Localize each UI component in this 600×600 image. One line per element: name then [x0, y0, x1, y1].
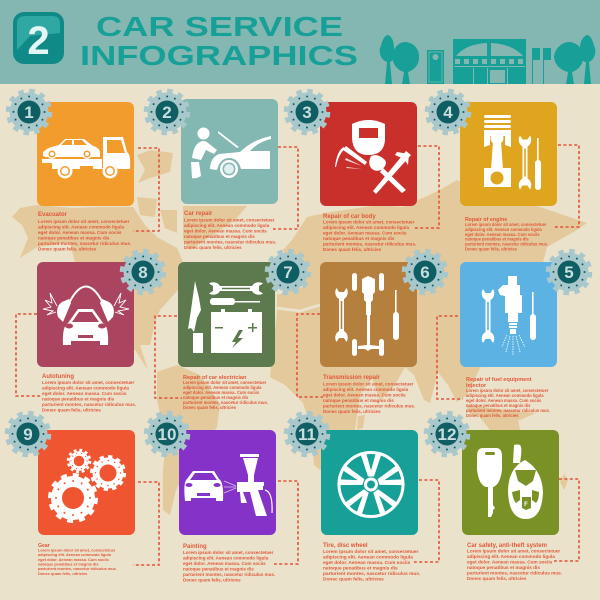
panel: 9 gear — [38, 430, 135, 535]
text block 9: parturient montes, nascetur ridiculus mus. — [38, 566, 117, 571]
text block 10: adipiscing elit. Aenean commodo ligula — [183, 556, 269, 560]
text block 6 — [323, 375, 415, 414]
gear 12 — [426, 413, 468, 455]
text block 3: parturient montes, nascetur ridiculus mus. — [323, 242, 416, 246]
gear 6 — [404, 251, 446, 293]
text block 11: Tire, disc wheel — [323, 543, 368, 549]
gear 3 — [286, 91, 328, 133]
text block 12: Donec quam felis, ultricies — [467, 576, 527, 581]
panel: 3 car body repair — [320, 102, 417, 206]
text block 12: adipiscing elit. Aenean commodo ligula — [467, 554, 555, 559]
world map — [12, 150, 587, 515]
text block 1: parturient montes, nascetur ridiculus mus. — [38, 241, 131, 246]
gear 8 — [122, 251, 164, 293]
text block 8: adipiscing elit. Aenean commodo ligula — [42, 386, 129, 390]
text block 8 — [42, 374, 136, 412]
text block 6: parturient montes, nascetur ridiculus mus. — [323, 404, 415, 408]
panel: 10 painting — [179, 430, 276, 535]
text block 11: natoque penatibus et magnis dis — [323, 566, 398, 572]
icon: tow truck — [42, 137, 130, 178]
panel: 6 transmission repair — [320, 262, 417, 367]
text block 12: Lorem ipsum dolor sit amet, consectetuer — [467, 548, 560, 554]
text block 9: Donec quam felis, ultricies — [38, 571, 87, 576]
text block 2: adipiscing elit. Aenean commodo ligula — [184, 223, 270, 228]
skyline: trees, kiosk, garage — [380, 35, 595, 84]
text block 2: eget dolor. Aenean massa. Cum sociis — [184, 228, 267, 234]
text block 4 — [465, 217, 548, 252]
text block 4: Repair of engine — [465, 217, 507, 223]
gear 1 — [8, 91, 50, 133]
header band — [0, 0, 600, 84]
text block 2: Lorem ipsum dolor sit amet, consectetuer — [184, 218, 275, 222]
text block 3 — [323, 214, 416, 252]
title — [80, 11, 358, 71]
text block 4: natoque penatibus et magnis dis — [465, 237, 529, 242]
icon: clip, wrench, screwdriver, battery — [188, 281, 263, 353]
text block 12: natoque penatibus et magnis dis — [467, 565, 540, 570]
text block 5: eget dolor. Aenean massa. Cum sociis — [466, 398, 542, 403]
gear 5: 5 — [564, 263, 574, 282]
text block 12: eget dolor. Aenean massa. Cum sociis — [467, 560, 553, 564]
text block 6: natoque penatibus et magnis dis — [323, 398, 394, 403]
panel: 5 fuel injector repair — [460, 262, 557, 367]
text block 9: natoque penatibus et magnis dis — [38, 562, 99, 566]
text block 10: natoque penatibus et magnis dis — [183, 566, 254, 572]
text block 2: parturient montes, nascetur ridiculus mus. — [184, 240, 276, 244]
title: INFOGRAPHICS — [80, 40, 358, 71]
text block 4: Donec quam felis, ultricies — [465, 246, 518, 252]
panel: 12 car safety — [462, 430, 559, 535]
text block 1: adipiscing elit. Aenean commodo ligula — [38, 224, 125, 230]
text block 2: natoque penatibus et magnis dis — [184, 234, 255, 239]
text block 10: parturient montes, nascetur ridiculus mus. — [183, 572, 275, 577]
icon: piston and tools — [484, 115, 541, 190]
gear 9: 9 — [23, 425, 33, 444]
text block 8: natoque penatibus et magnis dis — [42, 396, 115, 402]
text block 9 — [38, 543, 117, 576]
text block 6: Donec quam felis, ultricies — [323, 409, 381, 414]
text block 1: Evacuator — [38, 212, 68, 218]
text block 3: adipiscing elit. Aenean commodo ligula — [323, 225, 410, 230]
text block 1: Donec quam felis, ultricies — [38, 246, 97, 252]
gear 9 — [7, 413, 49, 455]
text block 9: eget dolor. Aenean massa. Cum sociis — [38, 557, 109, 562]
text block 4: eget dolor. Aenean massa. Cum sociis — [465, 232, 540, 237]
text block 3: Repair of car body — [323, 214, 376, 220]
text block 9: Lorem ipsum dolor sit amet, consectetuer — [38, 548, 116, 552]
gear 4: 4 — [443, 103, 453, 122]
gear 10 — [146, 413, 188, 455]
gear 7 — [267, 251, 309, 293]
gear 6: 6 — [420, 263, 430, 282]
text block 4: adipiscing elit. Aenean commodo ligula — [465, 227, 542, 232]
text block 6: eget dolor. Aenean massa. Cum sociis — [323, 392, 406, 398]
text block 11: Donec quam felis, ultricies — [323, 576, 384, 582]
text block 3: natoque penatibus et magnis dis — [323, 236, 395, 241]
icon: mechanic and car — [191, 128, 271, 178]
gear 11: 11 — [298, 425, 316, 444]
icon: car and spray gun — [184, 454, 272, 516]
gear 11 — [286, 413, 328, 455]
panel: 4 engine repair — [460, 102, 557, 206]
text block 8: Autotuning — [42, 374, 74, 380]
text block 5 — [466, 377, 550, 418]
gear 8: 8 — [138, 263, 148, 282]
text block 4: parturient montes, nascetur ridiculus mus. — [465, 242, 548, 247]
icon: wrench, injector, screwdriver — [482, 276, 536, 355]
map sea strip — [276, 305, 320, 311]
text block 10: Painting — [183, 544, 207, 550]
text block 11: parturient montes, nascetur ridiculus mus. — [323, 571, 420, 577]
icon: alloy wheel — [337, 452, 405, 517]
text block 7: parturient montes, nascetur ridiculus mus. — [183, 400, 268, 405]
text block 12 — [467, 543, 562, 581]
text block 10: eget dolor. Aenean massa. Cum sociis — [183, 561, 266, 566]
panel: 2 car repair — [181, 99, 278, 204]
text block 5: natoque penatibus et magnis dis — [466, 403, 531, 408]
panel: 1 evacuator — [37, 102, 134, 206]
text block 9: adipiscing elit. Aenean commodo ligula — [38, 552, 112, 557]
text block 1 — [38, 212, 131, 252]
text block 11 — [323, 543, 420, 582]
text block 4: Lorem ipsum dolor sit amet, consectetuer — [465, 222, 547, 227]
gear 1: 1 — [24, 103, 34, 122]
gear 4 — [427, 91, 469, 133]
text block 7: natoque penatibus et magnis dis — [183, 395, 249, 400]
title: CAR SERVICE — [96, 11, 343, 42]
text block 11: eget dolor. Aenean massa. Cum sociis — [323, 560, 411, 566]
text block 10 — [183, 544, 275, 582]
text block 1: Lorem ipsum dolor sit amet, consectetuer — [38, 219, 130, 224]
connector lines — [16, 145, 579, 565]
icon: key and alarm remote: F — [524, 502, 528, 508]
icon: gears — [50, 450, 124, 521]
text block 5: Repair of fuel equipment — [466, 377, 532, 383]
gear 7: 7 — [283, 263, 293, 282]
text block 7: Lorem ipsum dolor sit amet, consectetuer — [183, 380, 267, 385]
text block 2: Car repair — [184, 211, 213, 217]
text block 2: Donec quam felis, ultricies — [184, 245, 242, 250]
icon: car with headphones — [43, 286, 129, 345]
gear 2: 2 — [162, 103, 172, 122]
text block 7: adipiscing elit. Aenean commodo ligula — [183, 385, 262, 390]
text block 8: eget dolor. Aenean massa. Cum sociis — [42, 391, 127, 396]
gear 10: 10 — [158, 425, 176, 444]
panel: 8 autotuning — [37, 262, 134, 367]
text block 6: Transmission repair — [323, 375, 381, 381]
text block 12: parturient montes, nascetur ridiculus mus. — [467, 570, 562, 576]
text block 1: eget dolor. Aenean massa. Cum sociis — [38, 230, 122, 235]
text block 9: Gear — [38, 543, 50, 549]
text block 6: adipiscing elit. Aenean commodo ligula — [323, 387, 409, 392]
text block 3: Lorem ipsum dolor sit amet, consectetuer — [323, 220, 415, 224]
icon: wrench, chassis, screwdriver — [335, 273, 399, 356]
text block 7: Repair of car electrician — [183, 375, 247, 381]
text block 2 — [184, 211, 276, 250]
gear 3: 3 — [302, 103, 312, 122]
text block 8: Donec quam felis, ultricies — [42, 408, 101, 412]
text block 7: eget dolor. Aenean massa. Cum sociis — [183, 390, 260, 395]
text block 8: Lorem ipsum dolor sit amet, consectetuer — [42, 380, 135, 385]
text block 7: Donec quam felis, ultricies — [183, 405, 237, 410]
text block 5: injector — [466, 383, 487, 389]
badge: number 2: 2 — [27, 19, 50, 63]
text block 7 — [183, 375, 268, 410]
text block 1: natoque penatibus et magnis dis — [38, 236, 110, 240]
badge: number 2 — [13, 12, 64, 64]
gear 5 — [548, 251, 590, 293]
text block 3: eget dolor. Aenean massa. Cum sociis — [323, 230, 407, 236]
gear 12: 12 — [438, 425, 456, 444]
text block 6: Lorem ipsum dolor sit amet, consectetuer — [323, 382, 414, 386]
text block 3: Donec quam felis, ultricies — [323, 247, 382, 252]
text block 11: adipiscing elit. Aenean commodo ligula — [323, 554, 413, 560]
text block 5: Lorem ipsum dolor sit amet, consectetuer — [466, 388, 549, 393]
text block 5: parturient montes, nascetur ridiculus mus. — [466, 408, 550, 413]
text block 11: Lorem ipsum dolor sit amet, consectetuer — [323, 549, 419, 555]
text block 8: parturient montes, nascetur ridiculus mus. — [42, 402, 136, 407]
text block 10: Donec quam felis, ultricies — [183, 578, 241, 582]
panel: 7 car electrician — [178, 262, 275, 367]
panel: 11 tire disc wheel — [321, 430, 418, 535]
text block 5: adipiscing elit. Aenean commodo ligula — [466, 393, 544, 398]
text block 5: Donec quam felis, ultricies — [466, 413, 519, 418]
gear 2 — [146, 91, 188, 133]
text block 12: Car safety, anti-theft system — [467, 543, 547, 549]
icon: welding mask and hammers — [335, 120, 411, 194]
text block 10: Lorem ipsum dolor sit amet, consectetuer — [183, 550, 274, 555]
